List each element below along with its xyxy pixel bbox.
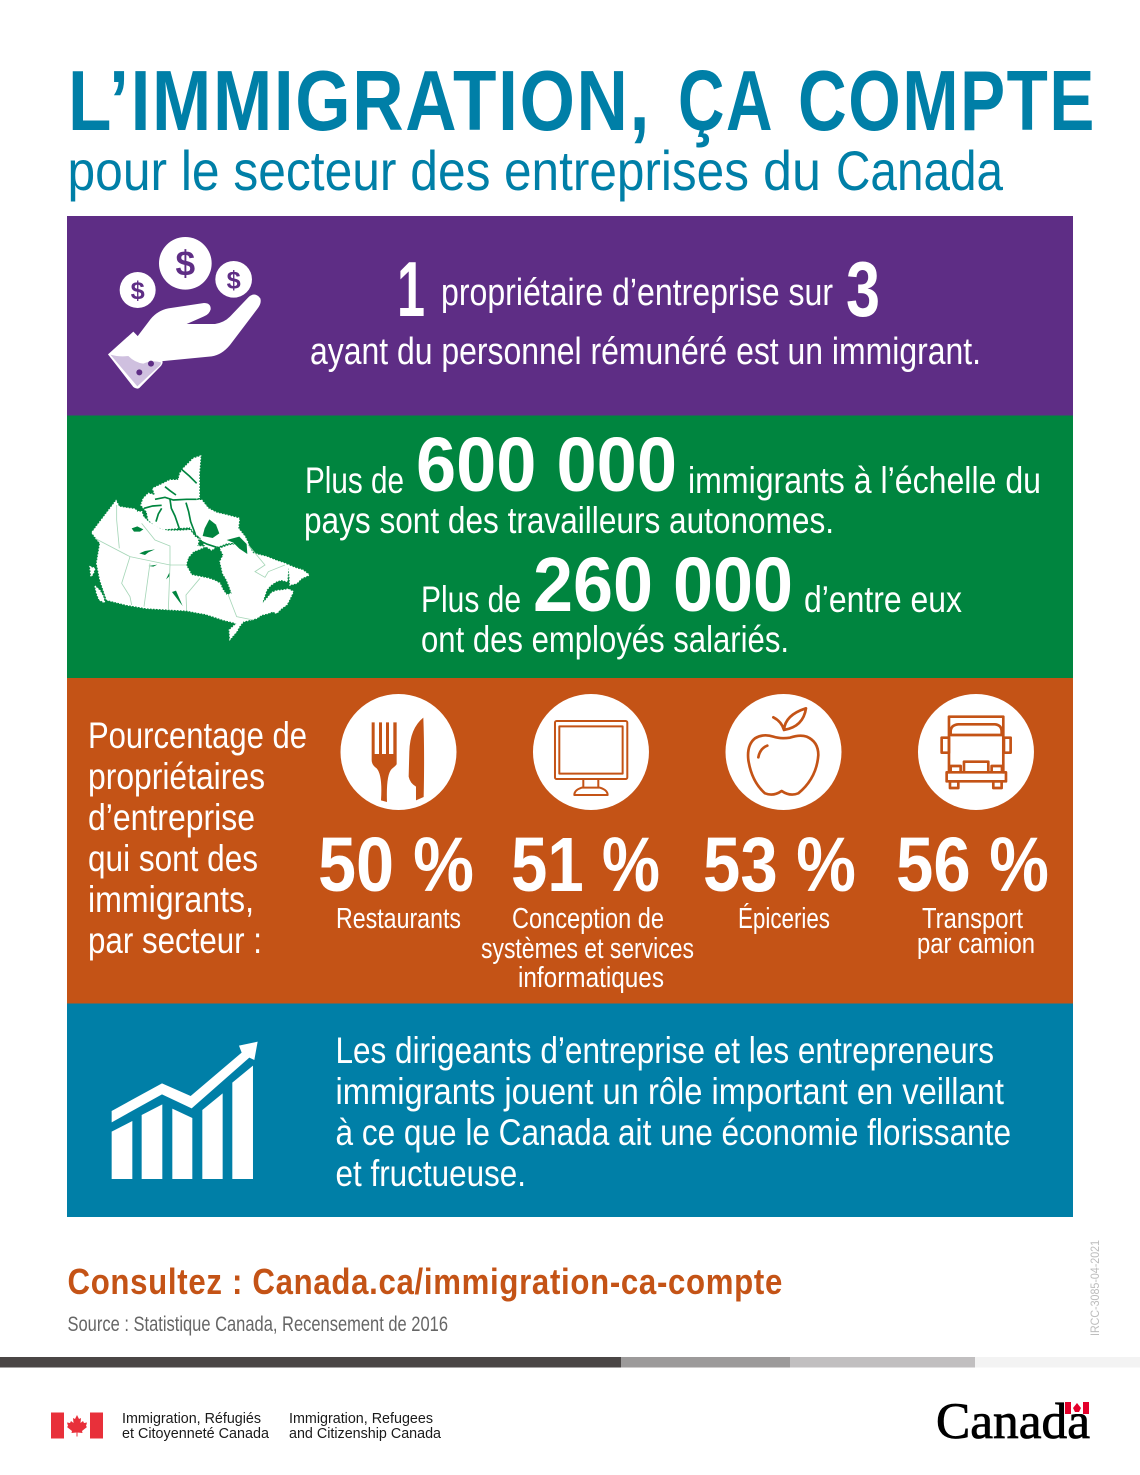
title: ÇA — [678, 54, 774, 149]
text: 600 000 statistic: pays sont des travailleurs autonomes. — [304, 500, 834, 541]
document code: IRCC-3085-04-2021 — [1090, 1240, 1102, 1336]
stat: grocery stores: 53 % — [703, 822, 856, 908]
title: L’IMMIGRATION, — [68, 54, 651, 149]
stat: computer systems: systèmes et services — [481, 933, 694, 965]
text: owner statistic: propriétaire d’entreprise sur — [441, 272, 833, 314]
department name: English: Immigration, Refugees — [289, 1411, 433, 1427]
stat: trucking — [896, 822, 1049, 960]
icon: rising bar chart with arrow — [112, 1042, 258, 1179]
link: website: Consultez : Canada.ca/immigration-ca-compte — [68, 1261, 783, 1302]
stat: computer systems: Conception de — [512, 903, 664, 935]
text: economy statement: Les dirigeants d’entreprise et les entrepreneurs — [336, 1030, 994, 1071]
text: 600 000 statistic — [304, 422, 1041, 541]
text: 600 000 statistic: 600 000 — [416, 422, 677, 508]
stat: grocery stores — [703, 822, 856, 935]
text: economy statement: immigrants jouent un rôle important en veillant — [336, 1071, 1005, 1112]
text: owner statistic second line: ayant du personnel rémunéré est un immigrant. — [310, 331, 981, 373]
text: 260 000 statistic: 260 000 — [533, 542, 793, 628]
icon: apple — [725, 694, 841, 810]
stat: restaurants: Restaurants — [336, 903, 461, 935]
icon: computer monitor — [533, 694, 649, 810]
text: panel heading: par secteur : — [88, 920, 262, 961]
text: 260 000 statistic: ont des employés salariés. — [421, 619, 789, 660]
icon: hand with coins: $ — [176, 245, 196, 284]
title — [68, 54, 1096, 149]
panel: economy — [67, 1004, 1073, 1217]
subtitle: du — [763, 139, 821, 202]
text: 600 000 statistic: Plus de — [305, 460, 404, 501]
text: panel heading — [88, 715, 307, 961]
department name: French: Immigration, Réfugiés — [122, 1411, 261, 1427]
stat: trucking: par camion — [917, 928, 1035, 960]
Arctic water channels — [144, 469, 217, 547]
text: economy statement: à ce que le Canada ait une économie florissante — [336, 1112, 1011, 1153]
lakes — [132, 526, 143, 532]
text: 260 000 statistic: Plus de — [421, 579, 521, 620]
subtitle — [68, 139, 1004, 202]
text: panel heading: qui sont des — [88, 838, 258, 879]
stat: restaurants: 50 % — [318, 822, 474, 908]
stat: trucking: Transport — [922, 903, 1023, 935]
footer colour bar — [0, 1357, 1140, 1368]
big number one: 1 — [397, 245, 425, 333]
subtitle: pour le secteur des — [68, 139, 490, 202]
icon: hand with coins — [108, 237, 261, 389]
text: panel heading: propriétaires — [88, 756, 265, 797]
text: 260 000 statistic — [421, 542, 962, 660]
department name: French: et Citoyenneté Canada — [122, 1426, 270, 1442]
icon: truck — [918, 694, 1034, 810]
text: 600 000 statistic: immigrants à l’échelle du — [688, 460, 1041, 501]
panel: percentage by sector — [67, 678, 1073, 1004]
logo: Canadian flag — [51, 1412, 103, 1438]
department name: French — [122, 1411, 270, 1442]
icon: hand with coins: $ — [227, 266, 241, 294]
stat: restaurants — [318, 822, 474, 935]
stat: trucking: 56 % — [896, 822, 1049, 908]
text: economy statement — [336, 1030, 1011, 1194]
subtitle: Canada — [836, 139, 1004, 202]
subtitle: entreprises — [504, 139, 749, 202]
department name: English — [289, 1411, 442, 1442]
stat: computer systems: informatiques — [518, 962, 664, 994]
text: panel heading: d’entreprise — [88, 797, 255, 838]
panel: self-employed — [67, 416, 1073, 678]
stat: computer systems — [481, 822, 694, 994]
source note: Source : Statistique Canada, Recensement de 2016 — [68, 1313, 448, 1336]
big number three: 3 — [846, 245, 880, 333]
text: panel heading: immigrants, — [88, 879, 254, 920]
icon: hand with coins: $ — [131, 277, 145, 305]
text: economy statement: et fructueuse. — [336, 1153, 526, 1194]
stat: grocery stores: Épiceries — [738, 902, 830, 935]
department name: English: and Citizenship Canada — [289, 1426, 442, 1442]
text: 260 000 statistic: d’entre eux — [804, 579, 962, 620]
icon: fork and knife — [340, 694, 456, 810]
text: panel heading: Pourcentage de — [88, 715, 307, 756]
stat: computer systems: 51 % — [511, 822, 660, 908]
panel: business owners — [67, 216, 1073, 416]
icon: map of Canada — [90, 456, 309, 639]
logo: Canada wordmark: Canada — [936, 1394, 1090, 1450]
